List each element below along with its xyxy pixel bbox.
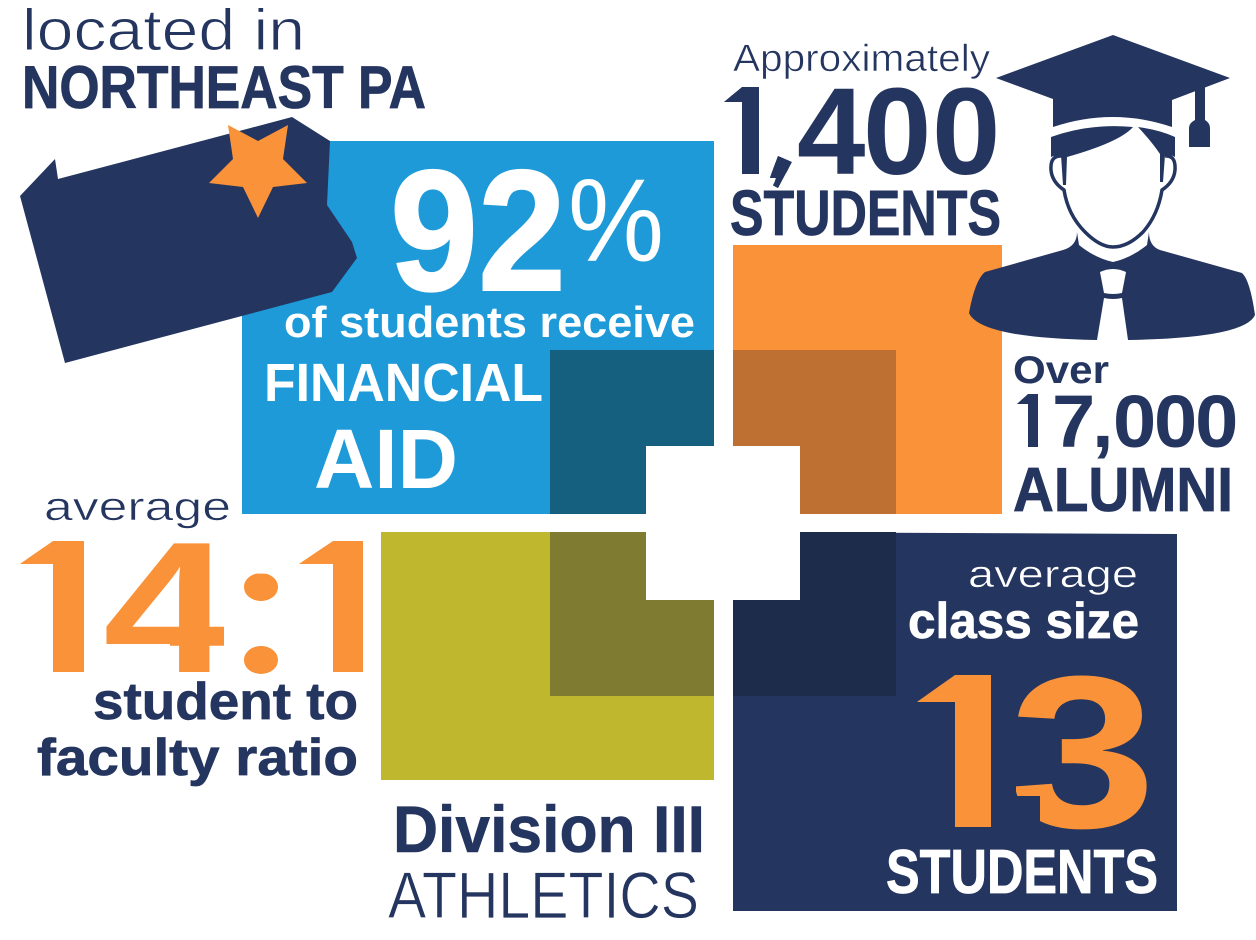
map: Pennsylvania — [20, 117, 357, 363]
heading: northeast pa: NORTHEAST PA — [22, 54, 426, 121]
of students receive: of students receive — [284, 298, 695, 347]
panel: class size — [733, 532, 1177, 911]
icon: star — [209, 125, 307, 218]
stat: student to faculty ratio: 14:1 — [0, 502, 404, 712]
panel: financial aid — [242, 135, 714, 514]
92 figure: 92 — [390, 135, 566, 327]
icon: graduate — [969, 35, 1255, 340]
stat: student to faculty ratio: student to — [93, 673, 358, 731]
percent sign: % — [568, 155, 664, 287]
stat: students — [724, 44, 1000, 236]
stat: alumni: ALUMNI — [1013, 456, 1233, 525]
stat: students: 1,400 — [712, 64, 1000, 201]
financial: FINANCIAL — [264, 353, 543, 413]
aid: AID — [314, 412, 458, 506]
panel: athletics block — [381, 532, 714, 780]
stat: athletics: ATHLETICS — [388, 858, 699, 932]
stat: athletics: Division III — [393, 792, 705, 866]
panel: alumni block — [733, 245, 1002, 514]
stat: students: STUDENTS — [730, 177, 1001, 249]
stat: alumni: Over — [1013, 349, 1109, 392]
stat: alumni — [1014, 356, 1236, 512]
13 figure: 13 — [890, 632, 1156, 874]
stat: student to faculty ratio: faculty ratio — [37, 729, 358, 787]
stat: student to faculty ratio — [20, 498, 363, 786]
class size label: class size — [908, 593, 1139, 649]
stat: alumni: 17,000 — [1008, 381, 1238, 464]
average label: average — [968, 554, 1138, 596]
stat: student to faculty ratio: average — [44, 485, 231, 529]
stat: athletics — [388, 792, 705, 932]
stat: students: Approximately — [733, 38, 990, 80]
students label: STUDENTS — [886, 838, 1158, 907]
